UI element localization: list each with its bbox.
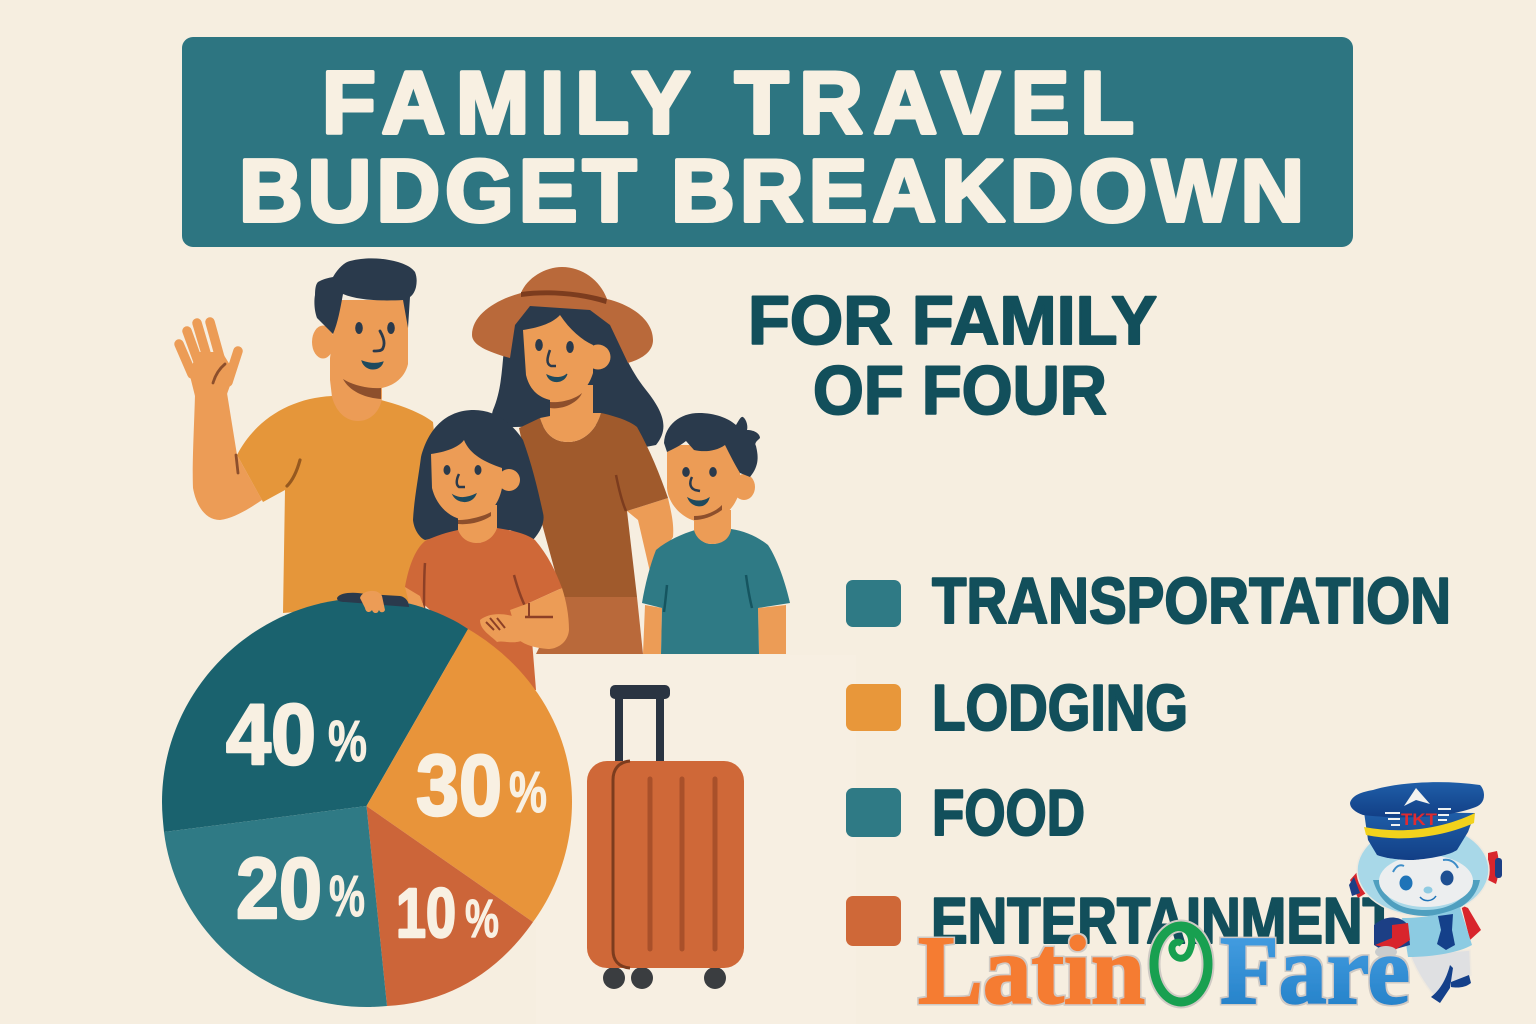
slice: lodging 30% [366,629,572,922]
mascot cap [1364,812,1475,860]
legend item: food: FOOD [932,776,1085,849]
hands gripping the pie [337,591,524,642]
label: 30%: 30 [416,738,502,834]
label: 20%: % [329,864,365,929]
logo: LatinOFare: Fare [1220,917,1410,1024]
label: 40%: % [328,709,367,774]
family illustration [179,258,790,690]
slice: entertainment 10% [366,806,533,1006]
mascot near arm [1374,918,1410,950]
suitcase [587,685,744,989]
backdrop patch behind suitcase [536,655,856,1024]
title banner [182,37,1353,247]
legend item: lodging: LODGING [932,671,1188,744]
daughter [405,410,569,690]
label: 40%: 40 [226,687,316,783]
legend item: food [846,776,1085,849]
label: 30%: % [509,760,547,825]
subtitle: for family of four: OF FOUR [813,352,1107,429]
pie chart [162,598,572,1007]
subtitle: for family of four: FOR FAMILY [748,282,1157,359]
mascot legs [1410,950,1471,1002]
legend item: transportation: TRANSPORTATION [932,564,1451,637]
logo swirl O [1154,926,1208,1002]
subtitle: for family of four [748,282,1157,429]
label: 20%: 20 [236,841,322,937]
legend [846,564,1451,957]
mascot shirt [1402,907,1472,957]
father [179,258,450,613]
label: 40% [226,687,367,783]
logo: LatinOFare: Latin [918,917,1145,1024]
slice: transportation 40% [162,598,468,832]
mother [472,267,673,654]
legend item: entertainment: ENTERTAINMENT [931,884,1396,957]
father's waving hand [179,322,238,396]
mascot [1349,782,1502,1003]
title banner: FAMILY TRAVEL [322,53,1134,152]
mascot far sleeve [1461,905,1481,940]
title banner: BUDGET BREAKDOWN [239,141,1304,240]
logo: LatinOFare [918,917,1410,1024]
label: 10%: 10 [396,874,456,952]
label: 10%: % [465,889,499,949]
slice: food 20% [164,806,387,1007]
suitcase body [587,761,744,968]
mascot helmet and face [1357,824,1489,916]
legend item: lodging [846,671,1188,744]
mascot ears [1488,851,1499,884]
son [642,413,790,654]
mascot: TKT [1401,810,1438,829]
suitcase handle [610,685,670,762]
suitcase wheels [603,967,726,989]
